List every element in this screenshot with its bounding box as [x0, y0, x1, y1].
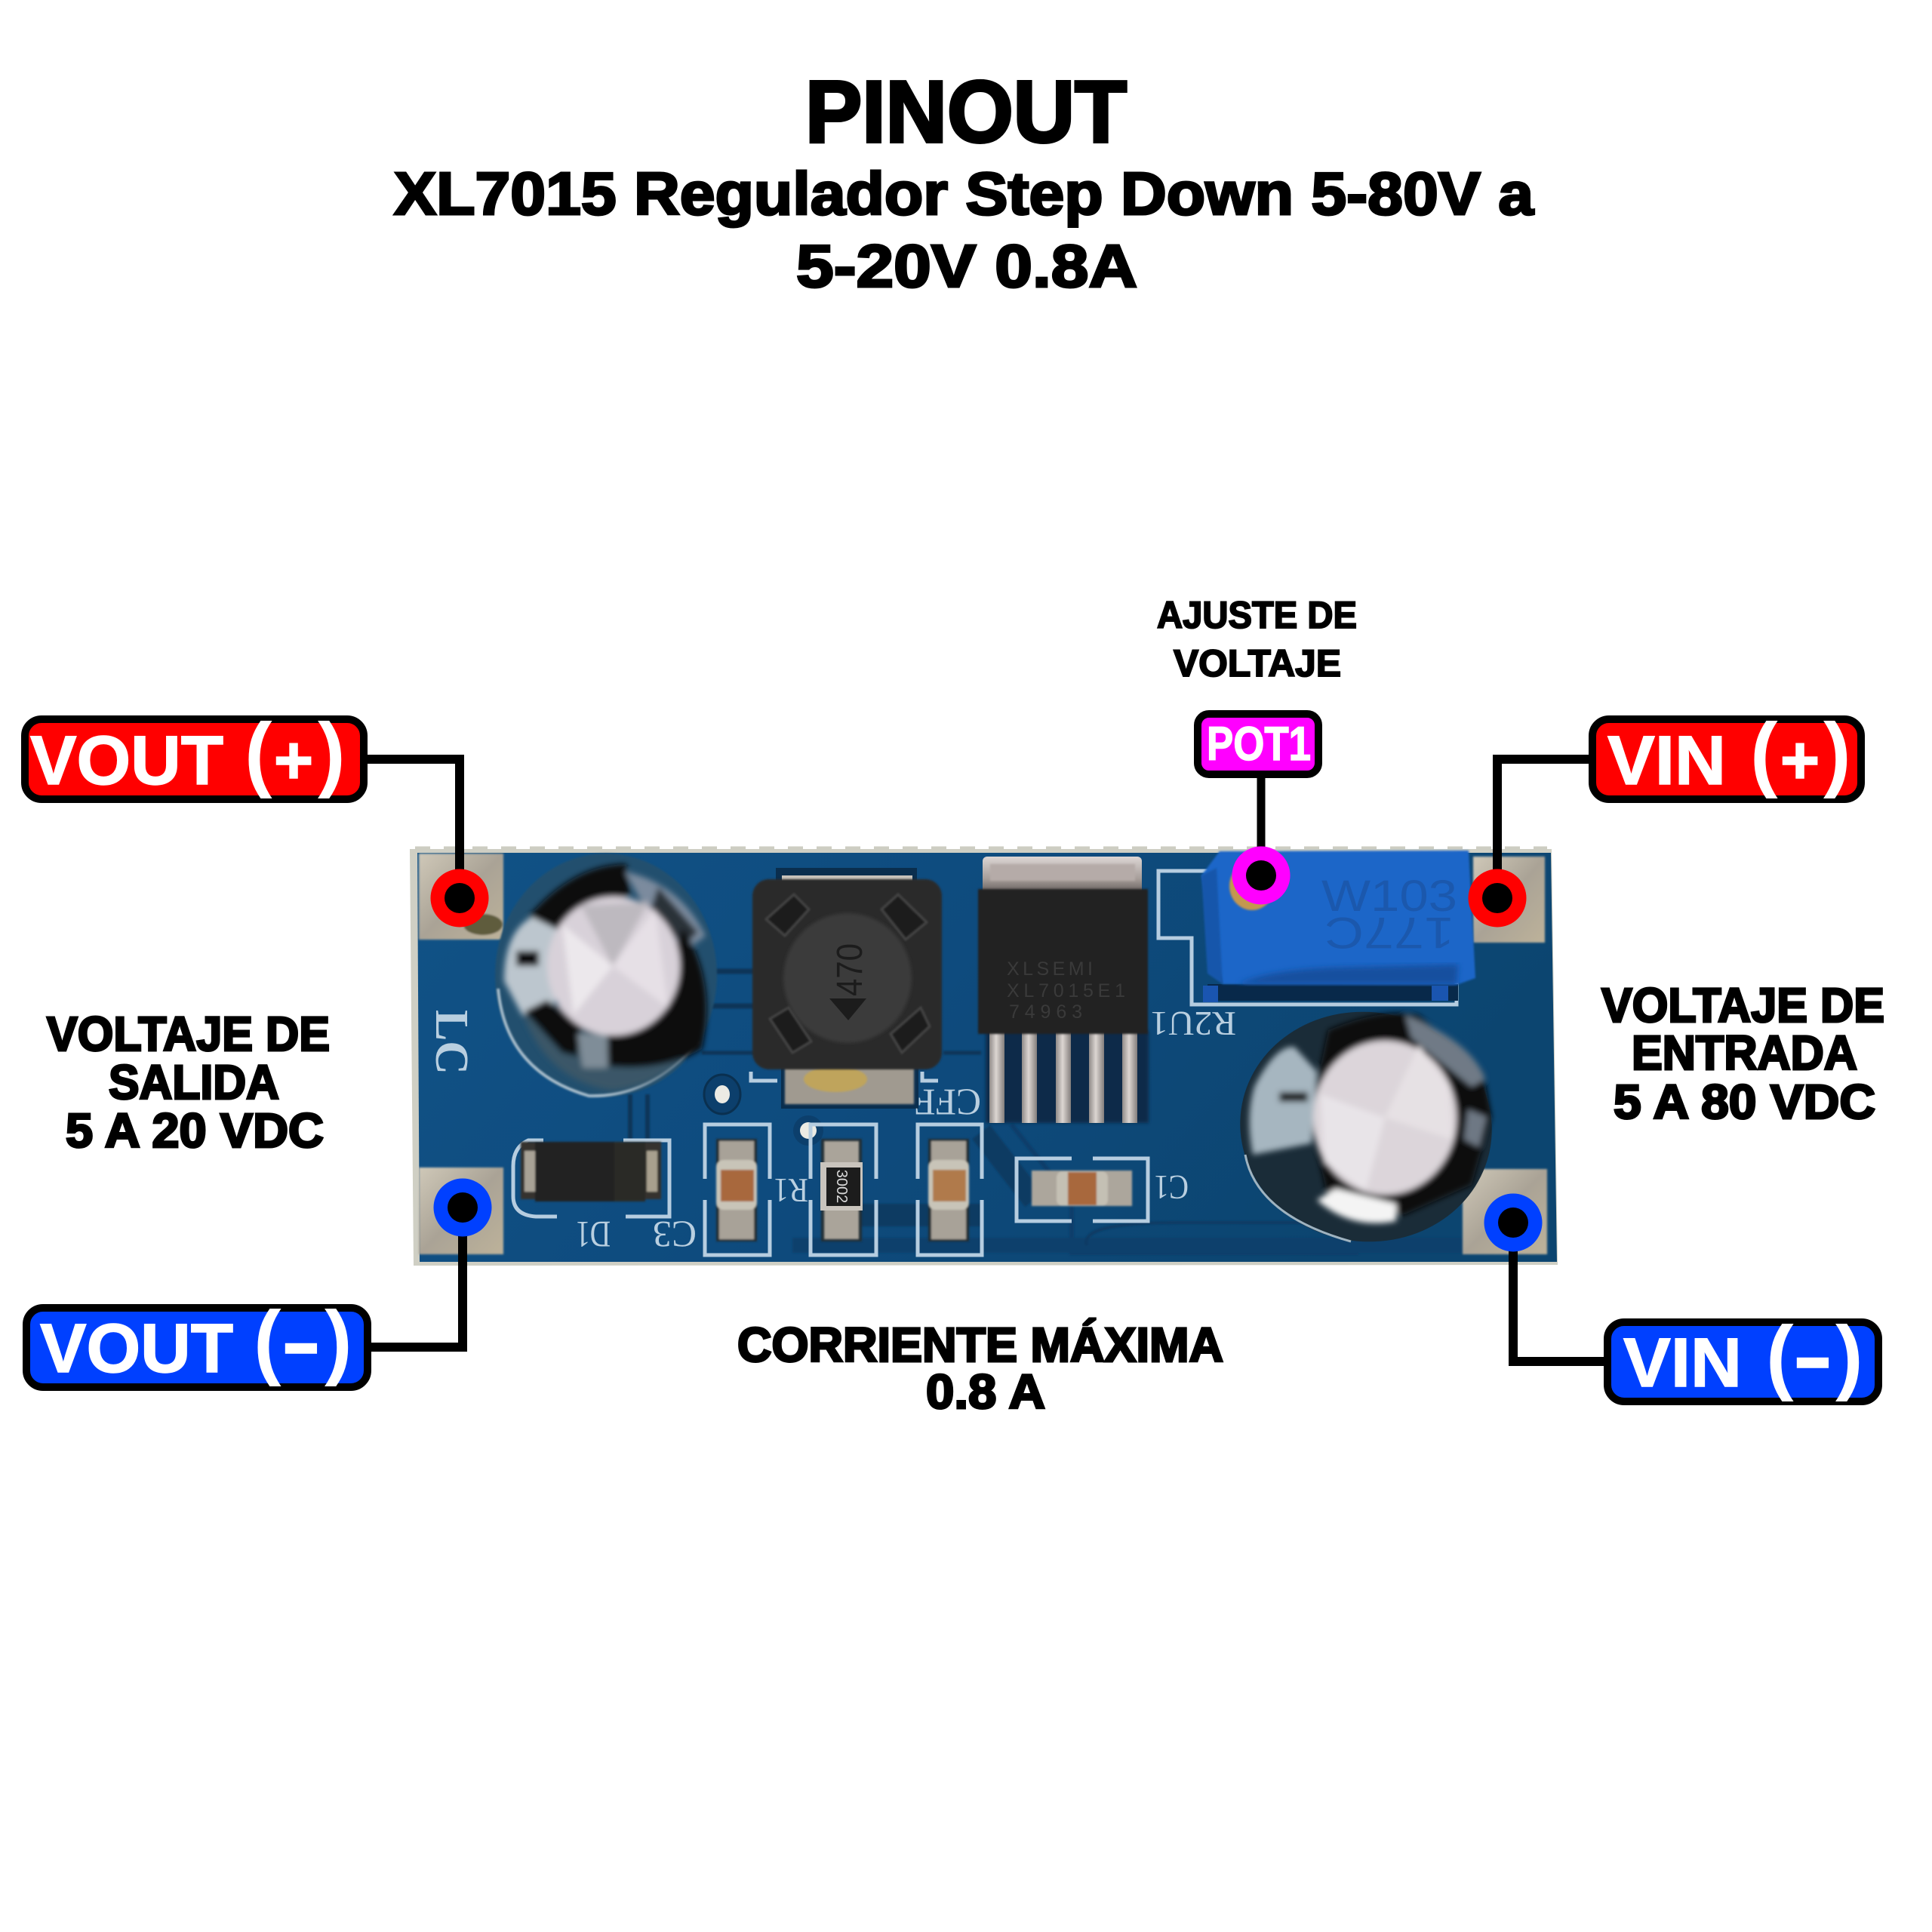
text: voltaje de entrada [1601, 978, 1884, 1129]
label: VOUT +: ) [318, 706, 346, 799]
capacitor C1 [1032, 1171, 1132, 1206]
label: VIN +: ( [1750, 706, 1778, 799]
text: corriente maxima: 0.8 A [926, 1364, 1045, 1419]
label: VIN +: ) [1823, 706, 1851, 799]
silkscreen: diode outline [513, 1140, 669, 1217]
text: voltaje de entrada: ENTRADA [1632, 1026, 1857, 1080]
via: left [704, 1075, 740, 1114]
solder pad: top right [1473, 857, 1545, 943]
text: ajuste de voltaje: AJUSTE DE [1157, 594, 1357, 636]
connector: VOUT + [368, 759, 481, 920]
label: VIN -: ( [1766, 1309, 1794, 1402]
silkscreen: capacitor C3 outline [705, 1124, 770, 1255]
label: VOUT -: VOUT [40, 1310, 233, 1387]
label: VIN -: VIN [1623, 1324, 1742, 1401]
text: voltaje de entrada: 5 A 80 VDC [1614, 1075, 1875, 1129]
silkscreen labels: CFF [915, 1081, 981, 1124]
potentiometer: 177C [1324, 908, 1454, 957]
regulator XL7015: XL7015E1 [1007, 980, 1125, 1001]
label: VIN -: - [1793, 1312, 1832, 1401]
via: centre [793, 1115, 823, 1146]
connector: VIN - [1491, 1201, 1604, 1361]
label: VOUT +: + [274, 723, 313, 798]
silkscreen labels: C1 [1154, 1168, 1189, 1207]
panel: circuit board [410, 848, 1558, 1266]
subtitle [394, 160, 1534, 300]
copper traces [630, 971, 1494, 1253]
solder pad: bottom right [1463, 1169, 1547, 1254]
silkscreen labels: R1 [774, 1171, 808, 1210]
text: voltaje de salida: SALIDA [109, 1055, 279, 1109]
label: VIN +: + [1780, 723, 1820, 798]
label: VOUT + [25, 706, 364, 799]
title: PINOUT [805, 63, 1127, 161]
label: VOUT - [26, 1294, 368, 1387]
label: VOUT +: ( [245, 706, 272, 799]
regulator XL7015: 74963 [1009, 1001, 1082, 1023]
silkscreen labels: D1 [576, 1214, 611, 1256]
label: VOUT -: - [281, 1298, 321, 1386]
capacitor: input [1225, 995, 1507, 1258]
silkscreen: inductor marks [751, 1072, 938, 1081]
potentiometer [1201, 851, 1475, 1002]
label: VOUT +: VOUT [30, 722, 223, 799]
label: VIN + [1592, 706, 1861, 799]
resistor R1 [820, 1139, 863, 1241]
label: VIN - [1607, 1309, 1878, 1402]
capacitor C3 [716, 1139, 757, 1241]
silkscreen labels [576, 1004, 1236, 1256]
subtitle: 5-20V 0.8A [796, 232, 1137, 300]
text: voltaje de salida: 5 A 20 VDC [66, 1103, 324, 1158]
diode D1 [521, 1142, 661, 1201]
inductor [752, 868, 942, 1109]
text: voltaje de salida [47, 1007, 330, 1158]
board surface [417, 853, 1557, 1262]
subtitle: XL7015 Regulador Step Down 5-80V a [394, 160, 1534, 227]
capacitor CFF [928, 1139, 969, 1241]
connector: POT1 [1239, 778, 1283, 897]
label: POT1: POT1 [1207, 718, 1311, 771]
resistor R1: 3002 [833, 1170, 850, 1203]
label: VIN +: VIN [1607, 722, 1726, 799]
connector: VOUT - [371, 1186, 485, 1347]
text: voltaje de salida: VOLTAJE DE [47, 1007, 330, 1061]
board edge [410, 849, 1558, 1266]
solder pad: top left [419, 854, 503, 940]
text: corriente maxima [737, 1318, 1223, 1419]
inductor: 470 [830, 943, 870, 996]
silkscreen: potentiometer outline [1158, 871, 1457, 1004]
silkscreen: capacitor CFF outline [918, 1124, 982, 1255]
silkscreen: LC logo: LC [426, 1010, 477, 1075]
regulator XL7015: XLSEMI [1007, 958, 1093, 980]
text: voltaje de entrada: VOLTAJE DE [1601, 978, 1884, 1032]
label: VOUT -: ( [254, 1294, 281, 1387]
capacitor: output [495, 854, 717, 1097]
label: VIN -: ) [1835, 1309, 1863, 1402]
solder pad: bottom left [419, 1168, 503, 1254]
regulator XL7015 [978, 857, 1149, 1123]
text: ajuste de voltaje: VOLTAJE [1174, 642, 1341, 685]
label: VOUT -: ) [325, 1294, 352, 1387]
connector: VIN + [1475, 759, 1589, 920]
text: ajuste de voltaje [1157, 594, 1357, 685]
silkscreen labels: R2U1 [1150, 1004, 1236, 1043]
silkscreen: resistor R1 outline [811, 1124, 876, 1255]
potentiometer: W103 [1321, 872, 1457, 921]
silkscreen: capacitor C1 outline [1017, 1158, 1148, 1221]
silkscreen labels: C3 [653, 1214, 697, 1256]
text: corriente maxima: CORRIENTE MÁXIMA [737, 1318, 1223, 1372]
